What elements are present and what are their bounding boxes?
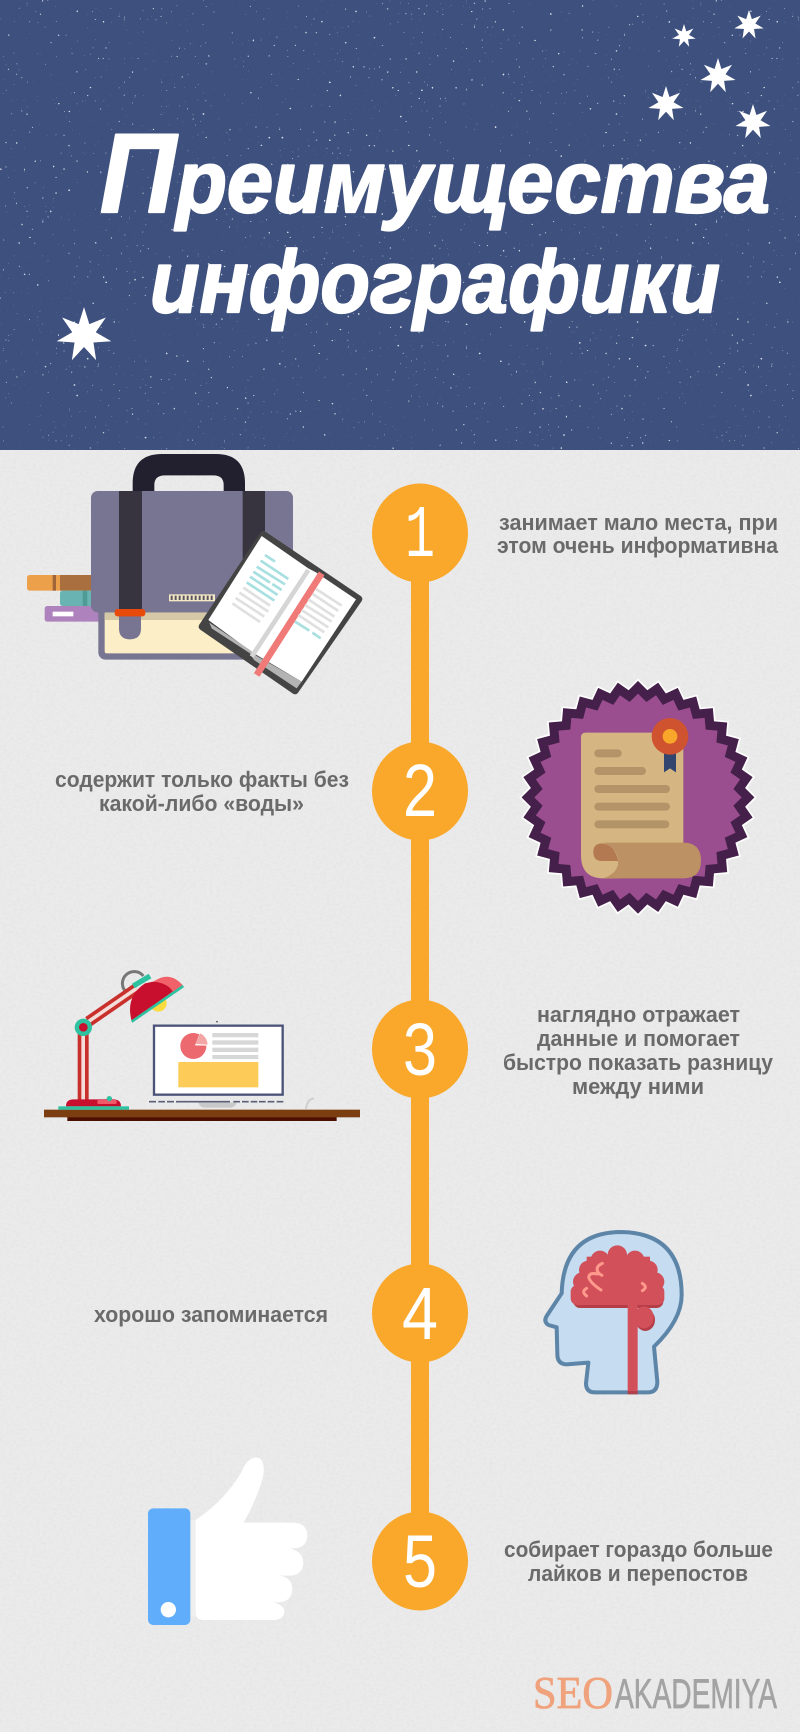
text: step 3 <box>503 1002 773 1099</box>
text: step 1: этом очень информативна <box>497 533 778 558</box>
header panel: starry sky <box>0 0 800 450</box>
title: инфографики <box>150 232 720 331</box>
lamp <box>58 972 183 1110</box>
head outline <box>545 1232 682 1392</box>
step 1 marker <box>372 484 468 582</box>
step 3 marker <box>372 1000 468 1098</box>
desk <box>44 1110 360 1121</box>
icon: stars <box>57 10 771 360</box>
monitor <box>149 1021 314 1110</box>
icon: desk with lamp and monitor <box>44 972 360 1121</box>
open book <box>202 535 359 691</box>
scroll <box>581 718 701 878</box>
text: step 5: собирает гораздо больше <box>504 1537 773 1562</box>
text: step 3: данные и помогает <box>537 1026 740 1051</box>
text: step 2: содержит только факты без <box>55 767 349 792</box>
step 3 marker: 3 <box>403 1008 437 1091</box>
text: step 3: быстро показать разницу <box>503 1050 773 1075</box>
zigzag badge <box>519 679 757 916</box>
hand <box>196 1457 307 1620</box>
step 5 marker: 5 <box>403 1520 437 1603</box>
step 2 marker: 2 <box>403 749 437 832</box>
icon: thumbs up <box>148 1457 307 1625</box>
text: step 5 <box>504 1537 773 1586</box>
logo: SEO <box>533 1668 613 1718</box>
icon: certificate badge <box>519 679 757 916</box>
step 4 marker <box>372 1264 468 1362</box>
text: step 1 <box>497 510 778 558</box>
text: step 3: между ними <box>572 1074 704 1099</box>
icon: bag with books <box>27 454 359 691</box>
paper background <box>0 450 800 1732</box>
text: step 3: наглядно отражает <box>537 1002 740 1027</box>
icon: head with brain <box>545 1232 682 1394</box>
timeline bar <box>411 533 429 1560</box>
logo <box>533 1668 777 1718</box>
step 1 marker: 1 <box>405 495 435 579</box>
step 2 marker <box>372 742 468 840</box>
title <box>100 111 770 331</box>
bag <box>91 454 293 660</box>
text: step 1: занимает мало места, при <box>499 510 778 535</box>
text: step 2 <box>55 767 349 816</box>
title: Преимущества <box>100 111 770 236</box>
text: step 4: хорошо запоминается <box>94 1302 328 1327</box>
timeline <box>372 484 468 1610</box>
cuff <box>148 1508 190 1625</box>
brain <box>571 1245 664 1394</box>
step 5 marker <box>372 1512 468 1610</box>
text: step 2: какой-либо «воды» <box>99 791 304 816</box>
step 4 marker: 4 <box>402 1272 438 1355</box>
text: step 5: лайков и перепостов <box>528 1561 748 1586</box>
books stack <box>27 575 101 622</box>
